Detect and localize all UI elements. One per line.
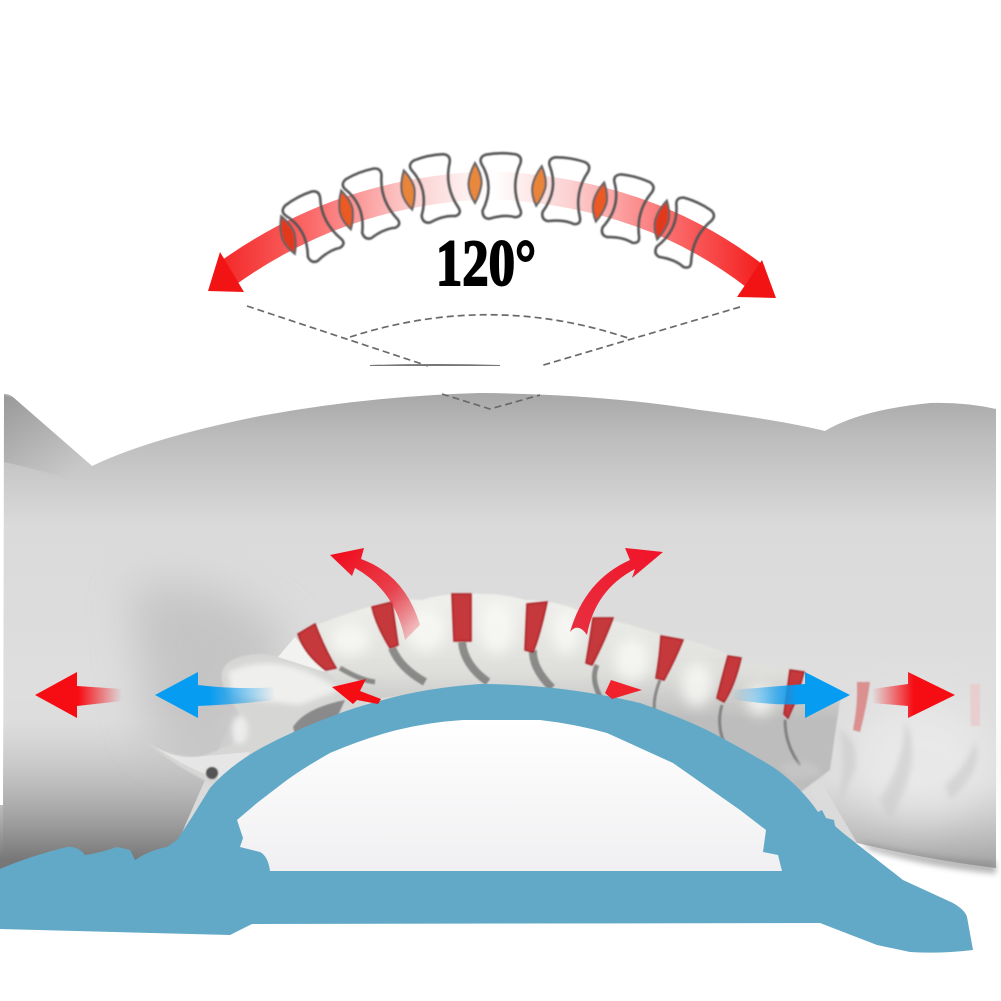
lumbar spine model: [146, 594, 980, 820]
red discs: [298, 594, 804, 718]
arrow: far right red: [872, 672, 955, 718]
red double arrow band: [208, 185, 776, 298]
arrow: left blue: [155, 672, 275, 718]
arrow: right blue: [732, 672, 850, 718]
arrow: upper right curved red: [570, 548, 663, 635]
vertebra highlights: [330, 602, 774, 716]
arrow: far left red: [35, 672, 122, 718]
foam stretcher: [0, 684, 973, 953]
inner white cavity: [237, 720, 782, 871]
vertebral bodies: [300, 594, 840, 800]
arrow: small left red: [332, 679, 381, 704]
intervertebral discs: [275, 163, 673, 256]
faded discs: [853, 682, 870, 732]
torso silhouette: [0, 393, 996, 874]
angle label: 120°: [436, 226, 536, 299]
top arc diagram: [208, 152, 776, 409]
faded lower right processes: [780, 720, 977, 820]
vertebral shadows: [340, 642, 800, 765]
pelvis and tail bones: [146, 637, 370, 785]
dashed angle guides: [247, 306, 740, 409]
vertebra outlines: [280, 152, 717, 271]
arrow: upper left curved red: [330, 548, 420, 640]
arrow: small right red: [605, 680, 642, 699]
